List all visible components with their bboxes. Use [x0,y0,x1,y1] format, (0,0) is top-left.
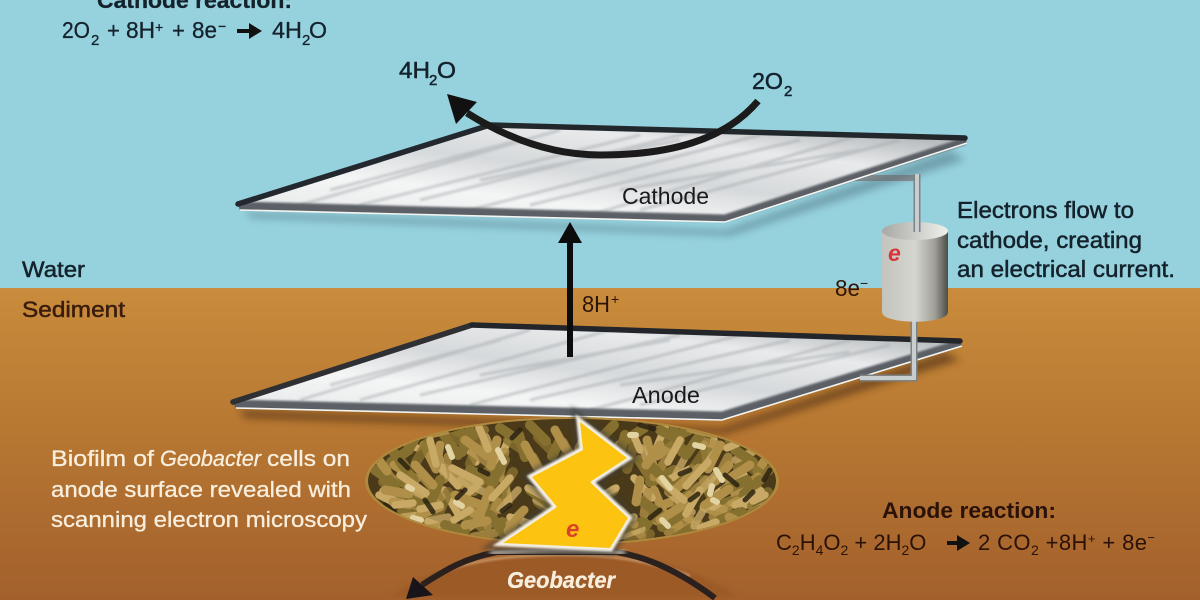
label: sediment: Sediment [22,297,125,322]
sediment background [0,288,1200,600]
label: 2O2 [752,68,792,100]
text: anode reaction: O [909,530,926,555]
cathode plate [238,125,967,222]
text: cathode reaction: 2O [62,17,90,43]
cathode shadow [245,150,965,236]
curved arrow: oxygen to water [447,94,758,155]
resistor cylinder [882,174,948,322]
text: biofilm note: Geobacter [160,446,263,471]
label: 8e-: 8e [835,275,860,301]
text: anode reaction: + 2H [848,530,902,555]
text: cathode reaction: 8e [192,17,217,43]
biofilm micrograph [365,417,779,549]
text: electrons flow [957,197,1175,282]
text: cathode reaction: + [172,18,185,43]
label: cathode: Cathode [622,183,709,209]
text: anode reaction: 2 [840,542,848,558]
text: anode reaction: 2 [792,542,800,558]
label: anode: Anode [632,382,700,408]
text: anode reaction: 2 CO [978,530,1031,555]
resistor cylinder: e [888,240,901,266]
electron bolt: e [566,516,579,543]
text: biofilm note: Biofilm of [51,446,155,471]
wire: upper [845,175,917,181]
text: cathode reaction: 8H [126,17,155,43]
text: cathode reaction: − [218,18,226,34]
label: 4H2O [399,57,456,89]
label: 2O2: 2 [784,83,792,100]
text: anode reaction: − [1147,530,1155,545]
water background [0,0,1200,289]
label: Geobacter: Geobacter [507,567,616,593]
text: cathode reaction: + [155,19,163,35]
glow under bacteria [392,552,738,597]
text: anode reaction [776,498,1155,558]
text: electrons flow: an electrical current. [957,256,1175,282]
label: water: Water [22,257,85,282]
text: cathode reaction: + [107,18,120,43]
text: anode reaction: 2 [902,542,910,558]
text: electrons flow: cathode, creating [957,227,1142,253]
text: biofilm note: anode surface revealed with [51,477,351,502]
label: 8H+: 8H [582,291,610,317]
anode shadow [240,352,960,434]
label: 8e-: − [860,275,868,291]
text: anode reaction: + 8e [1096,530,1147,555]
label: 8H+: + [611,291,619,307]
text: anode reaction: 2 [1031,542,1039,558]
text: cathode reaction: 4H [272,17,302,43]
text: cathode reaction [62,0,327,49]
text: anode reaction: Anode reaction: [882,498,1056,523]
text: biofilm note [51,446,367,532]
curved arrow: bacteria electrons [406,550,715,599]
text: anode reaction: O [823,530,840,555]
electron bolt [503,422,628,548]
label: 2O2: 2O [752,68,783,94]
anode plate [233,324,962,420]
text: anode reaction: 4 [816,542,824,558]
text: biofilm note: cells on [267,446,350,471]
text: cathode reaction: O [309,17,327,43]
wire: lower [860,318,914,378]
label: 4H2O: 2 [429,72,437,89]
text: electrons flow: Electrons flow to [957,197,1134,223]
label: 4H2O: 4H [399,57,430,83]
arrow: protons up [558,222,582,357]
label: 4H2O: O [437,57,456,83]
text: cathode reaction: 2 [302,32,310,49]
text: anode reaction: C [776,530,792,555]
text: anode reaction: +8H [1039,530,1088,555]
text: anode reaction: H [800,530,816,555]
text: anode reaction: + [1088,531,1096,546]
text: cathode reaction: 2 [91,32,99,49]
text: biofilm note: scanning electron microscopy [51,507,367,532]
